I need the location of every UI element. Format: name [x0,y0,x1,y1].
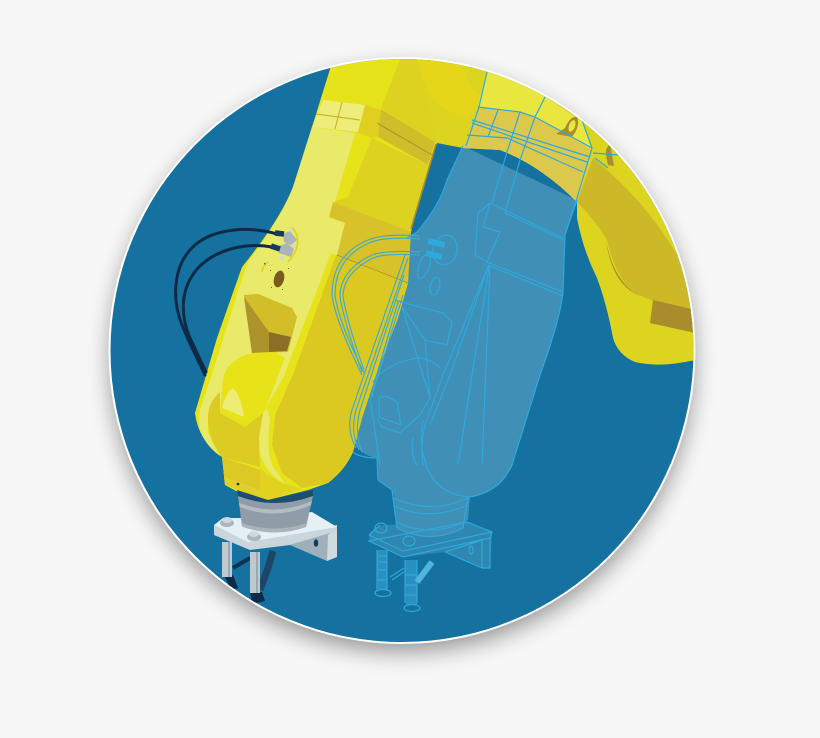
internal struts [425,262,490,465]
plate side [214,525,337,550]
mid section seam [337,255,408,283]
lower left lobe [208,392,263,467]
bolt left base [220,519,234,527]
leg shading [228,542,258,593]
ghost outline [353,146,577,498]
pocket outer [244,294,297,353]
ghost plate fill [369,522,492,568]
ghost overlay on shoulder, band [463,107,593,202]
block right edge [411,144,436,229]
right shoulder arm [408,59,694,365]
band [378,109,435,165]
hose dark [233,558,250,568]
upper box [475,203,563,296]
gray cup [238,496,313,532]
main yellow arm [195,50,437,500]
white circle rim [108,57,696,644]
wireframe ghost lines [332,72,618,612]
collar left [222,457,260,490]
cable tracks on yellow [332,235,420,452]
dome highlight [222,388,244,417]
ghost foot 2 [404,604,420,612]
collar right [260,468,302,500]
ghost cup [393,498,468,536]
small brown ring 2 [606,144,614,166]
ghost arm translucent body [350,146,577,534]
bolt left cap [222,517,232,523]
blue background disc [100,50,710,650]
bright strip on lobe [262,253,336,488]
metal fitting top [283,231,297,245]
screws [280,228,296,260]
connector arc [288,227,298,262]
lower cable [183,246,272,372]
circular scene [100,50,720,650]
metal fitting bottom [279,243,294,257]
bolt left [220,517,234,527]
bundle [350,255,408,452]
dots [264,263,289,290]
circle drop shadow [111,69,693,651]
ghost hose [417,562,432,582]
wire connector [426,241,445,257]
pale lower strip [258,408,285,484]
ghost bolt 2 [403,536,415,546]
pocket inner dark [244,297,269,353]
small brown ring [556,117,578,137]
ghost cup fill [394,499,463,536]
upper block face [333,138,428,232]
inner box [370,300,452,465]
connector rings [430,232,460,268]
ghost feet [375,590,391,596]
arm silhouette [195,50,437,500]
shoulder arm outer yellow [408,59,694,365]
shoulder arm mustard band [577,158,700,314]
bracket side [290,533,330,561]
right foot [250,592,265,604]
left foot [224,575,238,590]
illustration: robot arm and wireframe ghost in a circle [96,54,708,666]
shoulder arm bright hub [418,60,480,118]
inner cable [340,251,420,372]
ghost legs [377,550,417,603]
ghost flange body [369,498,492,605]
cup light band [239,501,312,514]
oval hole [428,276,442,296]
collar dot [237,483,239,485]
connector arm [415,252,433,280]
outer cable [332,235,420,375]
ghost bolts [375,523,387,533]
right leg [250,552,260,593]
dome [220,352,285,427]
pale side panel [199,127,355,456]
small arc [262,262,268,272]
upper cable [176,229,277,375]
right lobe [272,255,408,488]
shoulder cage [466,72,618,235]
brown block [650,300,693,332]
band left [357,104,381,138]
pale square seams [316,102,360,129]
plate top [214,512,337,542]
access hole [272,269,286,289]
bolt right cap [249,531,259,537]
ghost leg fills [377,550,417,605]
band line [377,123,432,155]
bracket hole [314,539,318,547]
cable connectors [271,228,297,260]
pocket inner brown [269,332,291,352]
yellow arcs and dots near connector [262,227,298,290]
pale square details [312,100,365,132]
bolt right [247,531,261,541]
mustard mid section [329,202,411,283]
cup rim [237,490,313,504]
hose coupling [260,551,273,590]
small ring hole [568,120,576,132]
arc and curves [373,358,440,465]
connector bottom [271,246,280,249]
cup lower rim [242,523,307,532]
ghost plate [369,522,492,568]
left leg [222,542,232,577]
bracket end [327,527,337,561]
bolt right base [247,533,261,541]
dome wire [379,397,401,425]
upper right panel [381,52,436,143]
ghost overlay on shoulder, pale top [463,68,593,202]
base flange [214,490,337,604]
ghost hole [469,546,473,554]
collar lower band [224,477,260,498]
connector top [275,233,284,234]
shadow crescent [606,240,640,296]
robot cables [176,229,277,375]
